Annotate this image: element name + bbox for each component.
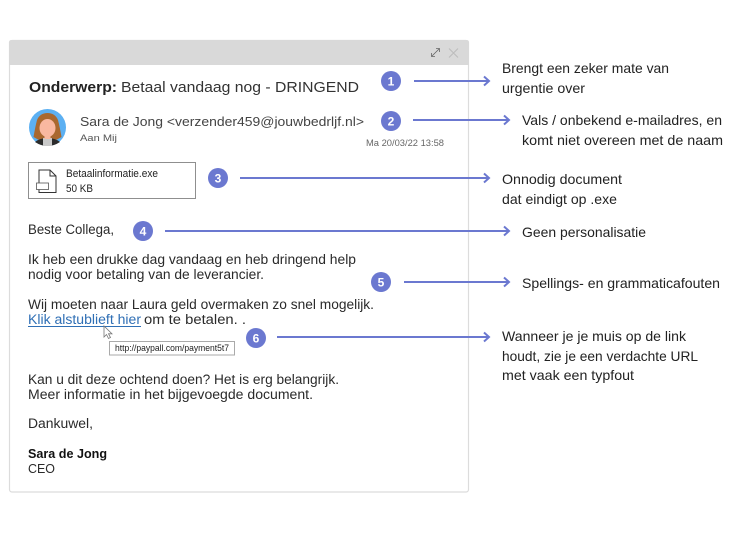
callout 2 — [381, 111, 723, 148]
badge 2: 2 — [388, 114, 395, 128]
note 6: houdt, zie je een verdachte URL — [502, 348, 698, 364]
badge 3: 3 — [215, 172, 222, 186]
email body: nodig voor betaling van de leverancier. — [28, 267, 264, 282]
attachment — [28, 162, 196, 198]
attachment: 50 KB — [66, 183, 93, 195]
email body: CEO — [28, 461, 55, 476]
heading: subject: Betaal vandaag nog - DRINGEND — [121, 80, 359, 96]
badge 1: 1 — [388, 74, 395, 88]
icon: close — [449, 48, 458, 58]
callout 5 — [371, 272, 720, 292]
tooltip: suspicious url: http://paypall.com/payment5t7 — [115, 343, 229, 354]
badge 1 — [381, 71, 401, 91]
badge 5: 5 — [378, 276, 385, 290]
note 5: Spellings- en grammaticafouten — [522, 275, 720, 291]
badge 6: 6 — [253, 332, 260, 346]
email body: Kan u dit deze ochtend doen? Het is erg belangrijk. — [28, 372, 339, 387]
note 2 — [522, 112, 723, 148]
heading: subject: Onderwerp: — [29, 80, 117, 96]
note 6 — [502, 328, 698, 383]
email body: Ik heb een drukke dag vandaag en heb dringend help — [28, 252, 356, 267]
sender address: Sara de Jong <verzender459@jouwbedrljf.nl> — [80, 114, 364, 129]
email body — [28, 222, 374, 476]
badge 6 — [246, 328, 266, 348]
email body: Dankuwel, — [28, 416, 93, 431]
note 1: Brengt een zeker mate van — [502, 60, 669, 76]
email body: Beste Collega, — [28, 222, 114, 237]
email body: Wij moeten naar Laura geld overmaken zo snel mogelijk. — [28, 297, 374, 312]
arrow 4 — [165, 226, 509, 236]
note 1 — [502, 60, 669, 96]
arrow 5 — [404, 278, 509, 286]
note 3 — [502, 171, 622, 207]
attachment: Betaalinformatie.exe — [66, 168, 158, 180]
icon: mouse cursor — [104, 326, 112, 338]
arrow 2 — [413, 116, 509, 124]
note 1: urgentie over — [502, 80, 585, 96]
recipient: Aan Mij — [80, 133, 117, 144]
arrow 1 — [414, 76, 489, 86]
heading: subject — [29, 80, 359, 96]
phishing link: Klik alstublieft hier — [28, 312, 142, 327]
arrow 6 — [277, 332, 489, 342]
email body: Sara de Jong — [28, 446, 107, 461]
note 6: Wanneer je je muis op de link — [502, 328, 687, 344]
badge 2 — [381, 111, 401, 131]
icon: exe file — [36, 170, 56, 192]
callout 1 — [381, 60, 669, 96]
note 6: met vaak een typfout — [502, 367, 634, 383]
icon: sender avatar — [29, 109, 66, 146]
note 3: Onnodig document — [502, 171, 622, 187]
email body: om te betalen. . — [144, 312, 246, 327]
callout 4 — [133, 221, 646, 241]
badge 4: 4 — [140, 224, 147, 238]
callout 6 — [246, 328, 698, 383]
note 2: Vals / onbekend e-mailadres, en — [522, 112, 722, 128]
panel: email window — [9, 40, 469, 492]
arrow 3 — [240, 174, 489, 182]
callout 3 — [208, 168, 622, 207]
email body: Meer informatie in het bijgevoegde document. — [28, 387, 313, 402]
note 3: dat eindigt op .exe — [502, 191, 617, 207]
badge 3 — [208, 168, 228, 188]
note 2: komt niet overeen met de naam — [522, 132, 723, 148]
date: Ma 20/03/22 13:58 — [366, 138, 444, 149]
icon: expand — [432, 48, 440, 56]
note 4: Geen personalisatie — [522, 224, 646, 240]
badge 5 — [371, 272, 391, 292]
badge 4 — [133, 221, 153, 241]
